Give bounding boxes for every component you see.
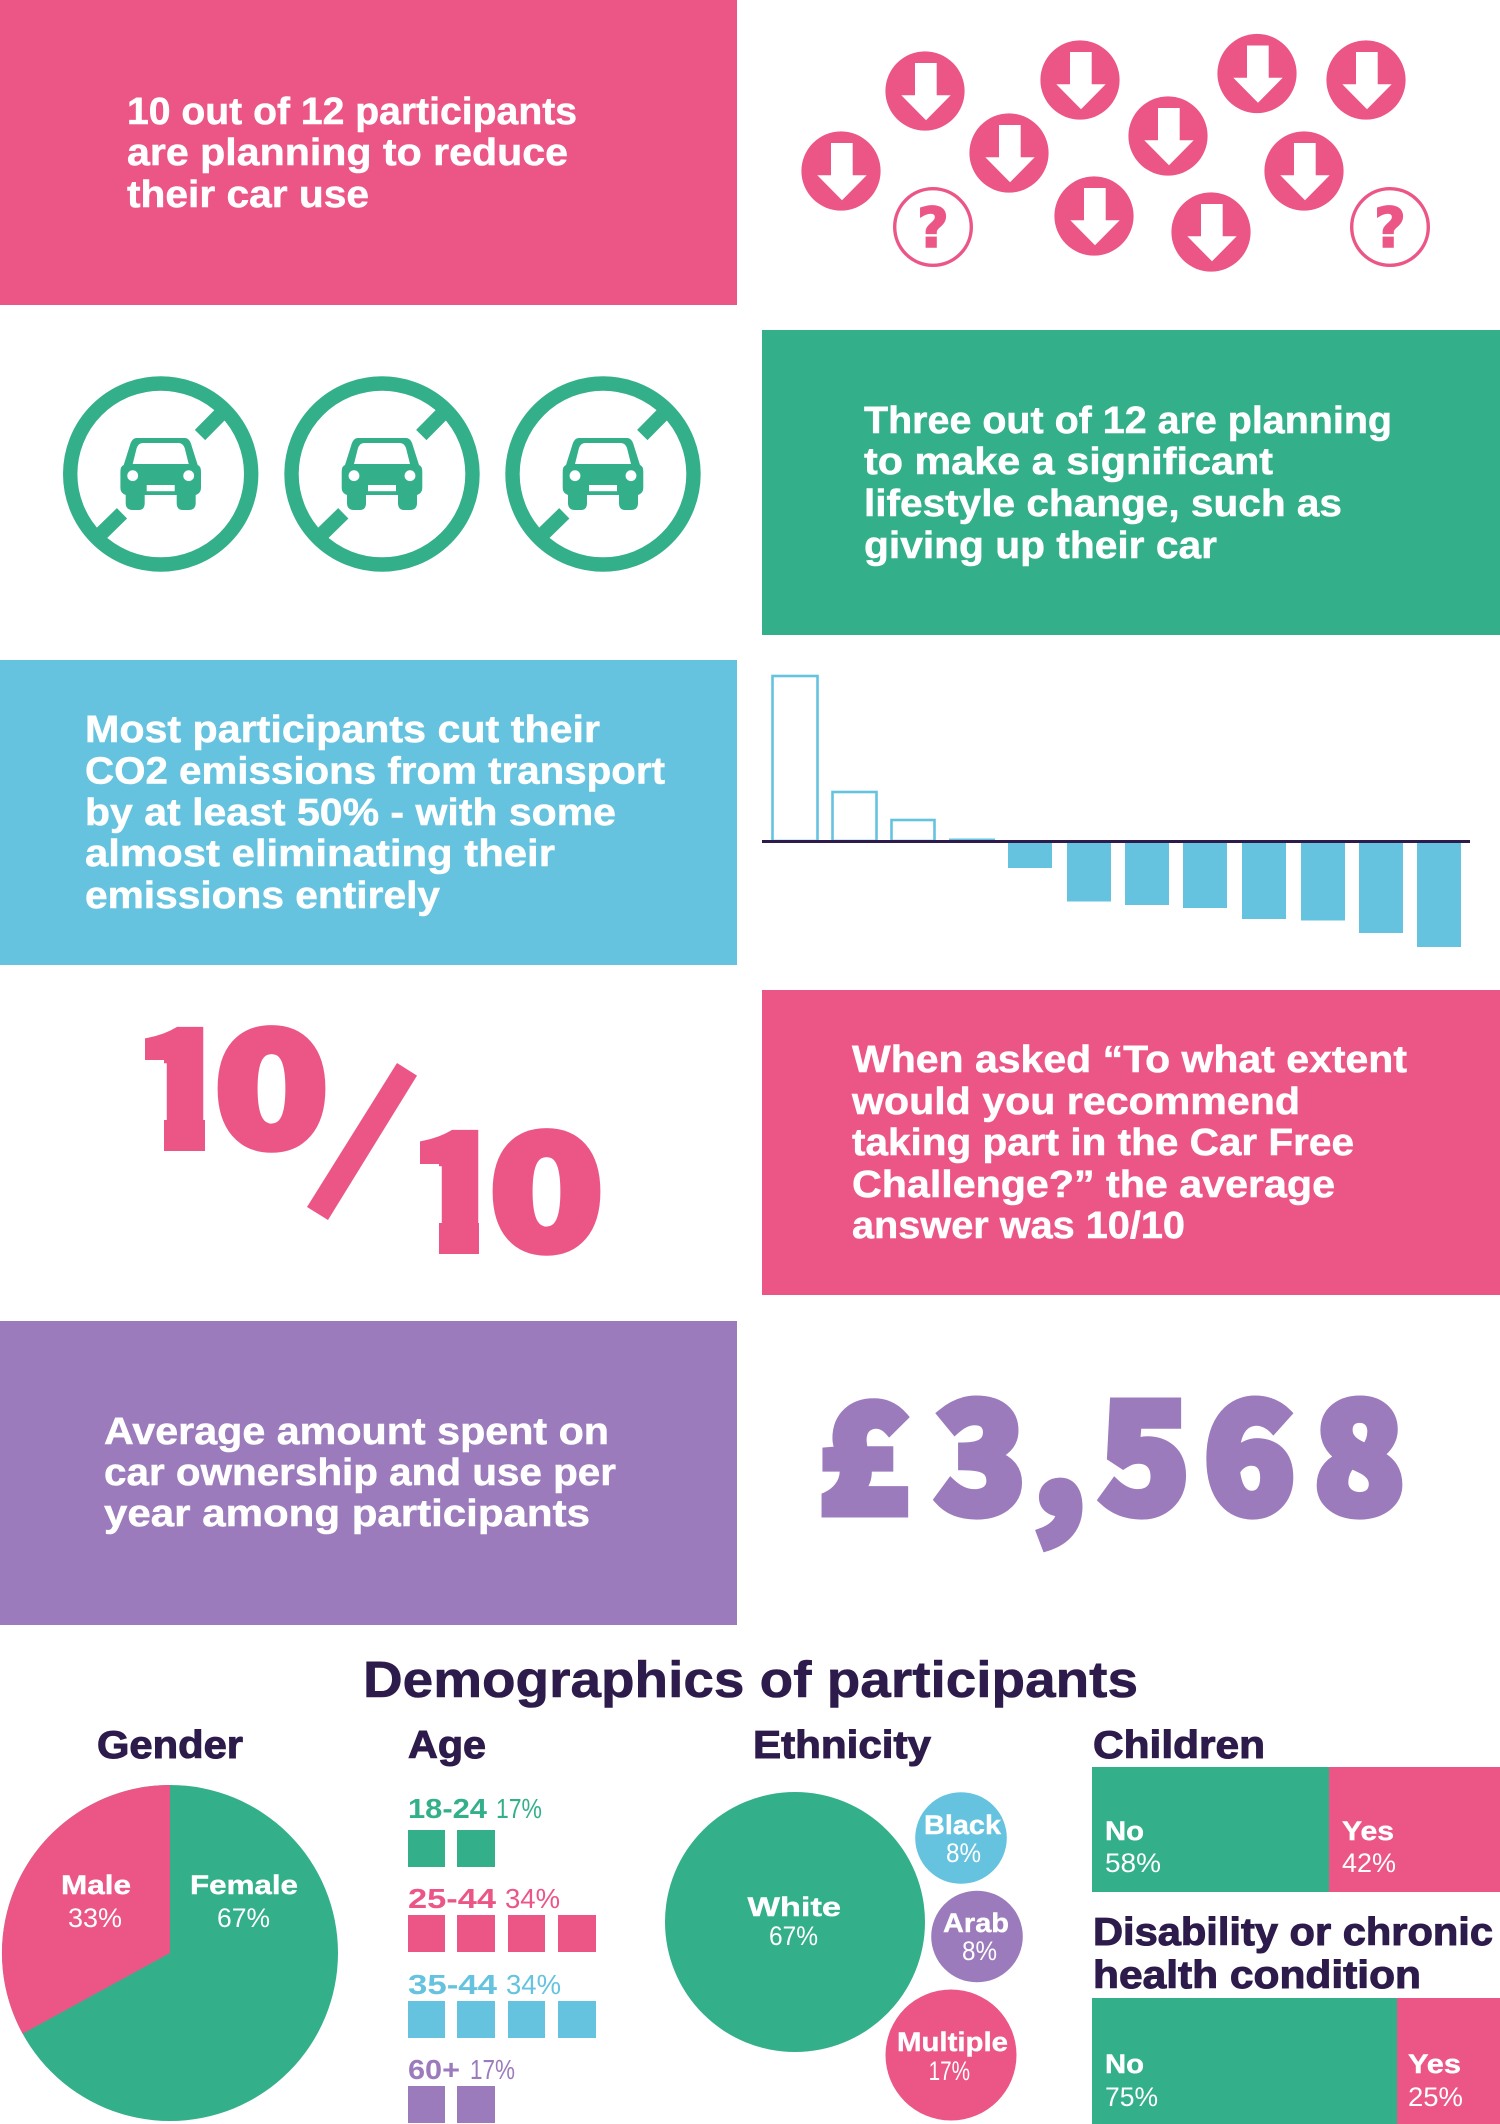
bubble: arab: [931, 1891, 1023, 1982]
bubble: multiple: [886, 1990, 1016, 2120]
bubble: arab: 8%: [962, 1936, 997, 1966]
panel: three out of 12 lifestyle change: lifestyle change, such as: [864, 483, 1342, 525]
icon: down arrow 2: [885, 51, 965, 131]
panel: three out of 12 lifestyle change: [762, 330, 1500, 635]
icon: down arrow 5: [1128, 96, 1208, 176]
panel: average car cost description: [0, 1321, 737, 1625]
age row 60+: 17%: [470, 2054, 515, 2085]
panel: recommendation score: When asked “To what extent: [852, 1039, 1407, 1081]
panel: CO2 emissions: emissions entirely: [85, 875, 440, 917]
age row 18-24: 17%: [496, 1793, 542, 1824]
icon: down arrow 8: [1264, 131, 1344, 211]
bar: children no: No: [1105, 1816, 1144, 1846]
age row 18-24: 18-24: [408, 1793, 487, 1824]
section: gender: Gender: [97, 1724, 243, 1767]
age row 25-44: [408, 1883, 596, 1952]
icons: three no-car signs: [70, 384, 693, 564]
section: children: [1092, 1724, 1500, 1892]
bar: disability no: [1092, 1998, 1397, 2124]
bar: disability yes: Yes: [1408, 2049, 1461, 2079]
big number: 10/10: 0: [214, 962, 329, 1194]
big number: 10/10: 1: [408, 1065, 505, 1297]
age row 35-44: 34%: [506, 1969, 561, 2000]
section: age: Age: [408, 1724, 486, 1767]
icons: down arrows and question marks: [801, 34, 1428, 272]
bubble: white: [665, 1792, 925, 2052]
panel: CO2 emissions: by at least 50% - with some: [85, 792, 616, 834]
bar chart: change in transport emissions: [762, 676, 1470, 947]
section: disability or chronic health condition: [1092, 1911, 1500, 2124]
bar: children no: [1092, 1767, 1329, 1892]
bar: disability no: No: [1105, 2049, 1144, 2079]
big number: 10/10: 1: [133, 962, 230, 1194]
panel: recommendation score: taking part in the Car Free: [852, 1122, 1354, 1164]
bar: disability yes: [1397, 1998, 1500, 2124]
big number: 10/10: 0: [489, 1065, 604, 1297]
section: children: Children: [1093, 1724, 1265, 1767]
bubble: multiple: Multiple: [897, 2027, 1008, 2057]
section: disability or chronic health condition: health condition: [1093, 1954, 1421, 1997]
age row 35-44: 35-44: [408, 1969, 498, 2000]
icon: no car 1: [70, 384, 251, 564]
bubble: multiple: 17%: [929, 2056, 970, 2086]
icon: question mark 2: ?: [1374, 196, 1406, 260]
bubble: white: 67%: [769, 1921, 818, 1951]
pie chart: gender: [2, 1785, 338, 2121]
panel: 10 out of 12 reduce car use: are planning to reduce: [127, 132, 568, 174]
panel: CO2 emissions: Most participants cut their: [85, 709, 600, 751]
bubble: arab: Arab: [943, 1908, 1009, 1938]
age row 25-44: 25-44: [408, 1883, 497, 1914]
panel: CO2 emissions: CO2 emissions from transport: [85, 750, 665, 792]
age row 60+: [408, 2054, 515, 2123]
panel: average car cost description: year among participants: [104, 1493, 590, 1535]
panel: average car cost description: car ownership and use per: [104, 1452, 616, 1494]
panel: three out of 12 lifestyle change: giving up their car: [864, 525, 1217, 567]
icon: no car 2: [292, 384, 472, 564]
bubble: white: White: [748, 1892, 841, 1922]
section: age: [408, 1724, 596, 2123]
panel: average car cost description: Average amount spent on: [104, 1411, 609, 1453]
section: ethnicity: Ethnicity: [753, 1724, 931, 1767]
big number: 10/10: [145, 1025, 600, 1256]
panel: recommendation score: would you recommend: [851, 1081, 1300, 1123]
panel: CO2 emissions: almost eliminating their: [85, 833, 555, 875]
age row 35-44: [408, 1969, 596, 2038]
bar: children no: 58%: [1105, 1848, 1161, 1878]
panel: 10 out of 12 reduce car use: [0, 0, 737, 305]
icon: down arrow 3: [969, 113, 1049, 193]
panel: 10 out of 12 reduce car use: 10 out of 12 participants: [127, 91, 577, 133]
bubble: black: Black: [924, 1810, 1002, 1840]
panel: CO2 emissions: [0, 660, 737, 965]
icon: down arrow 9: [1054, 176, 1134, 256]
section: ethnicity: [665, 1724, 1023, 2120]
section: gender: 67%: [217, 1903, 270, 1933]
icon: down arrow 7: [1326, 40, 1406, 120]
bar: disability no: 75%: [1105, 2082, 1158, 2112]
bar: children yes: [1329, 1767, 1500, 1892]
panel: three out of 12 lifestyle change: Three out of 12 are planning: [864, 400, 1392, 442]
panel: recommendation score: Challenge?” the average: [852, 1164, 1335, 1206]
panel: recommendation score: [762, 990, 1500, 1295]
bar: children yes: Yes: [1342, 1816, 1394, 1846]
panel: 10 out of 12 reduce car use: their car use: [127, 174, 369, 216]
icon: question mark 1: [895, 189, 971, 265]
big number: cost: £3,568: [818, 1340, 1405, 1556]
icon: down arrow 10: [1171, 192, 1251, 272]
bubble: black: [915, 1792, 1007, 1884]
section: gender: Female: [190, 1870, 298, 1900]
section: gender: 33%: [68, 1903, 122, 1933]
section: disability or chronic health condition: Disability or chronic: [1093, 1911, 1493, 1954]
heading: demographics: Demographics of participants: [363, 1651, 1138, 1708]
bubble: black: 8%: [946, 1838, 981, 1868]
icon: question mark 2: [1352, 189, 1428, 265]
icon: question mark 1: ?: [917, 196, 949, 260]
icon: no car 3: [512, 384, 694, 564]
age row 60+: 60+: [408, 2054, 460, 2085]
section: gender: [2, 1724, 338, 2121]
age row 18-24: [408, 1793, 542, 1867]
icon: down arrow 6: [1217, 34, 1297, 113]
panel: recommendation score: answer was 10/10: [852, 1205, 1185, 1247]
panel: three out of 12 lifestyle change: to make a significant: [864, 441, 1273, 483]
bar: children yes: 42%: [1342, 1848, 1396, 1878]
section: gender: Male: [61, 1870, 131, 1900]
bar: disability yes: 25%: [1408, 2082, 1463, 2112]
icon: down arrow 4: [1040, 40, 1120, 120]
icon: down arrow 1: [801, 131, 881, 211]
age row 25-44: 34%: [505, 1883, 560, 1914]
